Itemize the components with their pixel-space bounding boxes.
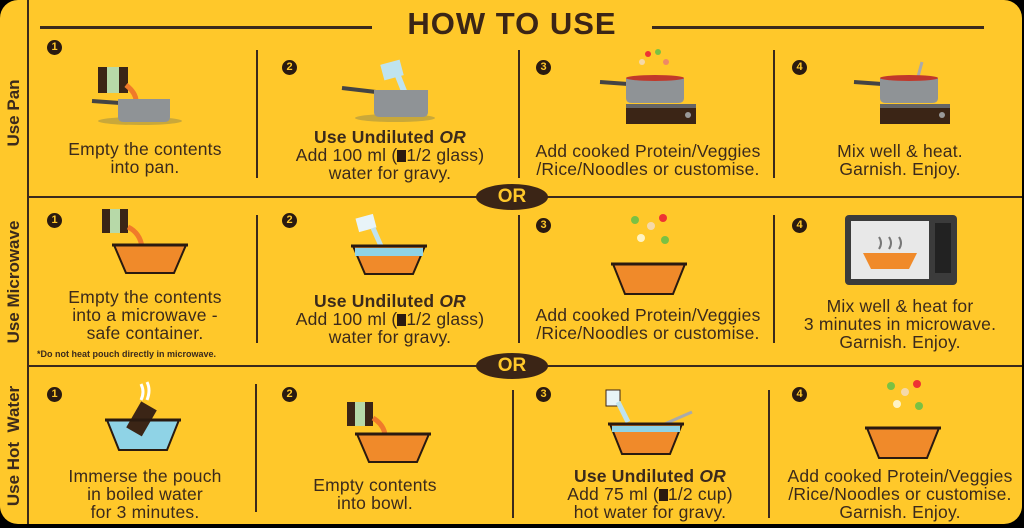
- row 3 column dividers: [255, 384, 257, 512]
- text row 3: for 3 minutes.: [91, 502, 199, 522]
- card background: Garnish. Enjoy.: [839, 159, 961, 179]
- card background: hot water for gravy.: [574, 502, 726, 522]
- text row 1: [68, 139, 222, 177]
- card background: 1: [51, 214, 58, 226]
- card background: Use Undiluted OR: [314, 291, 466, 311]
- title: HOW TO USE: [407, 6, 617, 41]
- step numbers: 1: [51, 41, 58, 53]
- icon: pouch in hot water bowl: [105, 381, 181, 451]
- text row 2: into a microwave -: [72, 305, 218, 325]
- text row 1: Empty the contents: [68, 139, 222, 159]
- card background: 2: [286, 388, 293, 400]
- card background: 3 minutes in microwave.: [804, 314, 996, 334]
- card background: Use Undiluted OR: [574, 466, 726, 486]
- side label: Use Pan: Use Pan: [4, 79, 23, 147]
- text row 2: Empty the contents: [68, 287, 222, 307]
- card background: into bowl.: [337, 493, 413, 513]
- card background: water for gravy.: [329, 327, 451, 347]
- icon: empty contents into bowl: [347, 402, 431, 463]
- card background: Mix well & heat.: [837, 141, 963, 161]
- step numbers: [47, 40, 62, 55]
- icon: stirring pan on stove: [854, 62, 950, 124]
- OR pill 1: OR: [498, 186, 526, 207]
- card background: /Rice/Noodles or customise.: [536, 323, 760, 343]
- card background: 4: [796, 219, 803, 231]
- icon: bowl with water: [351, 214, 427, 275]
- card background: 4: [796, 388, 803, 400]
- card background: Garnish. Enjoy.: [839, 502, 961, 522]
- icon: bowl with veggies 2: [865, 380, 941, 459]
- row 2 column dividers: [256, 215, 258, 343]
- side label: Use Hot Water: Use Hot Water: [4, 386, 23, 506]
- card background: /Rice/Noodles or customise.: [788, 484, 1012, 504]
- text row 3: [68, 466, 222, 522]
- card background: Add 75 ml ( 1/2 cup): [567, 484, 733, 504]
- text row 3: in boiled water: [87, 484, 203, 504]
- icon: microwave: [845, 215, 957, 285]
- icon: bowl with veggies: [611, 214, 687, 295]
- card background: 3: [540, 388, 547, 400]
- card background: Add cooked Protein/Veggies: [787, 466, 1013, 486]
- icon: pan with water: [342, 60, 435, 122]
- card background: Add 100 ml ( 1/2 glass): [296, 145, 484, 165]
- note: *Do not heat pouch directly in microwave.: [37, 349, 216, 359]
- icon: pan on stove with food: [600, 49, 696, 124]
- card background: Add cooked Protein/Veggies: [535, 141, 761, 161]
- card background: Empty contents: [313, 475, 437, 495]
- text row 2: safe container.: [87, 323, 203, 343]
- icon: hot water into bowl: [606, 390, 692, 455]
- card background: 2: [286, 214, 293, 226]
- left column divider: [27, 0, 29, 524]
- card background: Use Undiluted OR: [314, 127, 466, 147]
- card background: /Rice/Noodles or customise.: [536, 159, 760, 179]
- card background: 3: [540, 61, 547, 73]
- card background: Mix well & heat for: [827, 296, 973, 316]
- text row 3: Immerse the pouch: [68, 466, 222, 486]
- card background: Garnish. Enjoy.: [839, 332, 961, 352]
- card background: 1: [51, 388, 58, 400]
- OR pill 2: [476, 353, 548, 379]
- OR pill 1: [476, 184, 548, 210]
- row 1 column dividers: [256, 50, 258, 178]
- text row 1: into pan.: [111, 157, 179, 177]
- card background: 3: [540, 219, 547, 231]
- card background: 2: [286, 61, 293, 73]
- icon: bowl with pouch (microwave row): [102, 209, 188, 274]
- card background: Add cooked Protein/Veggies: [535, 305, 761, 325]
- card background: water for gravy.: [329, 163, 451, 183]
- row dividers: [27, 196, 1022, 198]
- OR pill 2: OR: [498, 355, 526, 376]
- card background: 4: [796, 61, 803, 73]
- card background: Add 100 ml ( 1/2 glass): [296, 309, 484, 329]
- icon: pan with pouch: [92, 67, 182, 125]
- text row 2: [68, 287, 222, 343]
- side label: Use Microwave: Use Microwave: [4, 221, 23, 343]
